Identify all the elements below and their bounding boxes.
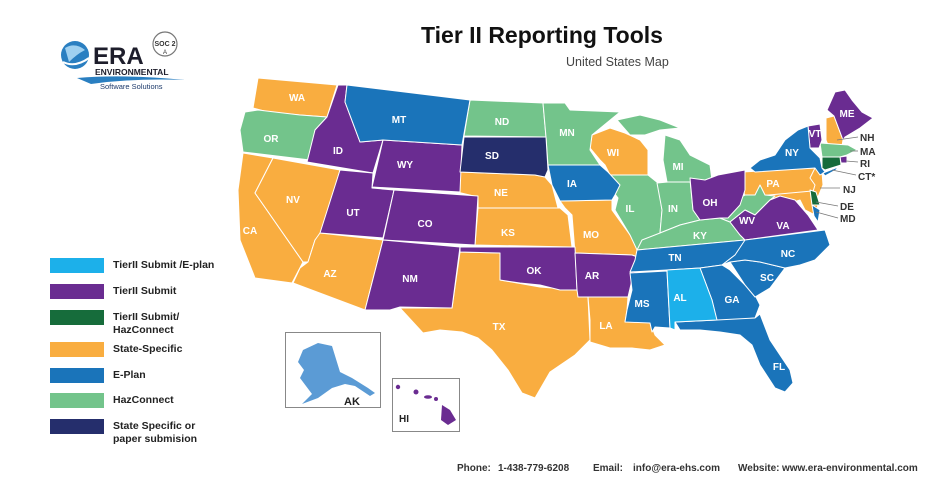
footer: contact info: www.era-environmental.com bbox=[782, 463, 918, 474]
inset: Alaska: AK bbox=[344, 396, 360, 408]
state labels: IA bbox=[567, 179, 577, 190]
state labels: NC bbox=[781, 249, 795, 260]
logo text: Software Solutions: Software Solutions bbox=[100, 82, 163, 91]
inset: Alaska bbox=[286, 332, 380, 408]
state labels: OK bbox=[526, 266, 542, 277]
callouts: northeast small states: RI bbox=[860, 159, 870, 170]
logo text: ERA: ERA bbox=[93, 43, 144, 70]
state labels: IL bbox=[626, 204, 634, 215]
state labels: VT bbox=[809, 129, 821, 140]
state labels: KY bbox=[693, 231, 707, 242]
legend: TierII Submit /E-plan bbox=[113, 259, 214, 271]
state labels: MT bbox=[392, 115, 406, 126]
title: Tier II Reporting Tools bbox=[421, 22, 663, 48]
state labels: SC bbox=[760, 273, 774, 284]
state labels: WA bbox=[289, 93, 305, 104]
icon: SOC 2 badge bbox=[153, 32, 177, 56]
icon: SOC 2 badge: SOC 2 bbox=[154, 41, 176, 48]
state labels: CA bbox=[243, 226, 257, 237]
callouts: northeast small states: MA bbox=[860, 147, 876, 158]
state labels: TX bbox=[493, 322, 506, 333]
footer: contact info: 1-438-779-6208 bbox=[498, 463, 569, 474]
state labels bbox=[243, 93, 855, 373]
state labels: FL bbox=[773, 362, 785, 373]
legend: HazConnect bbox=[113, 394, 174, 406]
logo text: ENVIRONMENTAL: ENVIRONMENTAL bbox=[95, 67, 169, 77]
state labels: WY bbox=[397, 160, 413, 171]
callouts: northeast small states: MD bbox=[840, 214, 856, 225]
state labels: ME bbox=[840, 109, 855, 120]
state labels: MO bbox=[583, 230, 599, 241]
icon: globe bbox=[61, 41, 89, 69]
footer: contact info: Email: bbox=[593, 463, 623, 474]
callouts: northeast small states bbox=[816, 133, 876, 225]
callouts: northeast small states: CT* bbox=[858, 172, 875, 183]
footer: contact info: Website: bbox=[738, 463, 780, 474]
state labels: ID bbox=[333, 146, 343, 157]
logo bbox=[61, 31, 184, 91]
legend: paper submision bbox=[113, 433, 197, 445]
callouts: northeast small states: NH bbox=[860, 133, 874, 144]
legend: E-Plan bbox=[113, 369, 146, 381]
subtitle: United States Map bbox=[566, 55, 669, 69]
legend: State Specific or bbox=[113, 420, 195, 432]
state labels: GA bbox=[724, 295, 740, 306]
state labels: AR bbox=[585, 271, 600, 282]
inset: Hawaii: HI bbox=[399, 414, 409, 425]
legend item: State Specific or paper submision bbox=[50, 419, 197, 445]
footer: contact info bbox=[457, 463, 918, 474]
state labels: LA bbox=[599, 321, 613, 332]
state labels: WV bbox=[739, 216, 755, 227]
state labels: SD bbox=[485, 151, 499, 162]
state labels: ND bbox=[495, 117, 509, 128]
state labels: NE bbox=[494, 188, 508, 199]
footer: contact info: Phone: bbox=[457, 463, 491, 474]
state labels: MI bbox=[672, 162, 684, 173]
legend item: TierII Submit/HazConnect bbox=[50, 310, 180, 336]
legend item: E-Plan bbox=[50, 368, 146, 383]
state labels: UT bbox=[346, 208, 360, 219]
legend: TierII Submit/ bbox=[113, 311, 179, 323]
state labels: NM bbox=[402, 274, 418, 285]
state labels: MS bbox=[634, 299, 650, 310]
legend item: State-Specific bbox=[50, 342, 182, 357]
callouts: northeast small states: NJ bbox=[843, 185, 856, 196]
state labels: IN bbox=[668, 204, 678, 215]
state labels: KS bbox=[501, 228, 515, 239]
state labels: PA bbox=[766, 179, 780, 190]
legend: State-Specific bbox=[113, 343, 182, 355]
state labels: CO bbox=[418, 219, 433, 230]
state labels: NV bbox=[286, 195, 300, 206]
legend: HazConnect bbox=[113, 324, 174, 336]
legend item: TierII Submit /E-plan bbox=[50, 258, 214, 273]
inset: Hawaii bbox=[392, 378, 460, 432]
legend item: HazConnect bbox=[50, 393, 174, 408]
state labels: TN bbox=[668, 253, 682, 264]
state labels: AL bbox=[673, 293, 687, 304]
callouts: northeast small states: DE bbox=[840, 202, 854, 213]
icon: SOC 2 badge: A bbox=[163, 50, 167, 56]
legend: TierII Submit bbox=[113, 285, 176, 297]
state labels: WI bbox=[607, 148, 619, 159]
legend bbox=[50, 258, 214, 445]
state labels: VA bbox=[776, 221, 790, 232]
state labels: OH bbox=[702, 198, 718, 209]
state labels: AZ bbox=[323, 269, 337, 280]
legend item: TierII Submit bbox=[50, 284, 176, 299]
state labels: OR bbox=[264, 134, 279, 145]
state labels: MN bbox=[559, 128, 575, 139]
state labels: NY bbox=[785, 148, 799, 159]
footer: contact info: info@era-ehs.com bbox=[633, 463, 720, 474]
